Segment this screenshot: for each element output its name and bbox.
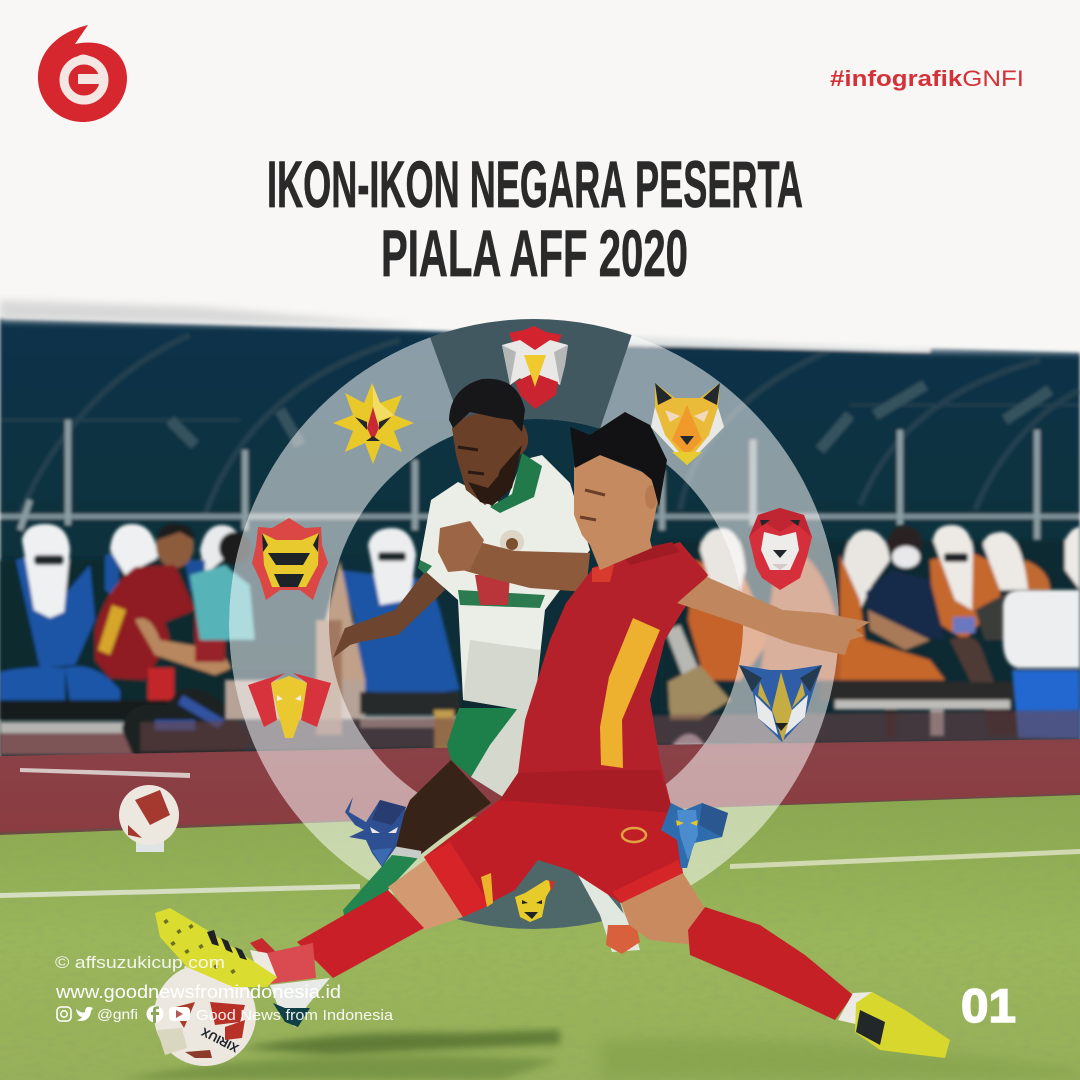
- bag: [122, 689, 250, 760]
- dugout shelter: [0, 318, 1080, 770]
- photo credit: © affsuzukicup.com: [55, 953, 225, 972]
- yellow side stripe: [600, 618, 660, 768]
- arm across chest: [440, 537, 590, 592]
- shadow under header: [0, 300, 420, 326]
- player: Vietnam in red: [155, 412, 950, 1058]
- icon: red and yellow elephant: [248, 673, 331, 738]
- right orange seats: [660, 525, 1080, 748]
- hair: [449, 379, 525, 432]
- social media row: [57, 1006, 394, 1024]
- outstretched arm: [677, 577, 870, 655]
- far boot: [606, 925, 640, 954]
- title line two: PIALA AFF 2020: [381, 216, 688, 290]
- icon: red lion: [749, 508, 812, 590]
- hashtag: #infografik GNFI: [830, 66, 1024, 91]
- seated staff with mask: [866, 526, 1020, 735]
- far thigh and leg: [621, 873, 704, 945]
- icon: blue buffalo: [345, 797, 406, 867]
- title: [267, 147, 803, 290]
- handle: @gnfi: [97, 1006, 138, 1022]
- central bench seats: [225, 528, 460, 750]
- icon: blue wolf: [739, 665, 822, 742]
- icon: facebook: [146, 1006, 164, 1023]
- left yellow boot: [155, 908, 277, 987]
- kit logo: [622, 828, 646, 842]
- left blue seats: [0, 524, 255, 760]
- cooler box: [1003, 590, 1080, 739]
- head: [452, 413, 528, 505]
- left arm: [333, 565, 445, 658]
- highlighted top segment: [430, 319, 632, 428]
- ball brand: XIRIUX: [199, 1025, 241, 1055]
- white ankle: [838, 992, 872, 1025]
- website: www.goodnewsfromindonesia.id: [55, 982, 341, 1002]
- other player's boot behind: [250, 938, 330, 1027]
- icon: twitter: [76, 1007, 93, 1021]
- ankle wrap: [267, 943, 316, 984]
- page number: 01: [961, 979, 1016, 1032]
- icon: bottom yellow mascot: [515, 880, 555, 922]
- shorts: [447, 708, 534, 797]
- running track: [0, 710, 1080, 836]
- left red sock: [297, 890, 424, 978]
- foreground match ball: [154, 964, 256, 1066]
- top white fade: [0, 0, 1080, 352]
- logo emblem: [64, 54, 106, 100]
- player: Indonesia in white and green: [333, 379, 640, 954]
- bench frame: [820, 682, 1080, 700]
- hair: [570, 412, 667, 507]
- icon: dragon: [252, 518, 328, 600]
- bench: [0, 700, 220, 720]
- icon: tiger: [651, 383, 724, 465]
- icon: yellow star: [333, 383, 414, 464]
- ring translucent band: [279, 369, 789, 879]
- teal shirt staff: [190, 532, 255, 640]
- flag patch: [592, 565, 614, 582]
- stadium photo background: [0, 298, 1080, 1080]
- highlighted bottom segment: [457, 818, 624, 929]
- icon: instagram: [57, 1007, 71, 1021]
- white jersey: [420, 455, 590, 712]
- logo: [38, 25, 127, 122]
- icon ring: [279, 260, 789, 980]
- icon: youtube: [169, 1007, 190, 1021]
- icon: blue elephant: [661, 803, 728, 868]
- channel name: Good News from Indonesia: [196, 1007, 394, 1024]
- seated player in red: [95, 524, 232, 712]
- grass pitch: [0, 795, 1080, 1080]
- far leg: [578, 875, 640, 952]
- green sock: [343, 855, 418, 920]
- badge: [500, 530, 524, 554]
- icon: rooster: [502, 326, 568, 409]
- near leg: [388, 760, 491, 858]
- red shorts: [424, 800, 683, 917]
- right boot: [855, 992, 950, 1058]
- match ball on the sideline: [119, 785, 179, 852]
- right red sock: [688, 907, 853, 1020]
- near thigh: [388, 858, 463, 930]
- neck and face: [574, 455, 658, 570]
- green collar: [490, 453, 542, 513]
- red jersey: [495, 542, 708, 815]
